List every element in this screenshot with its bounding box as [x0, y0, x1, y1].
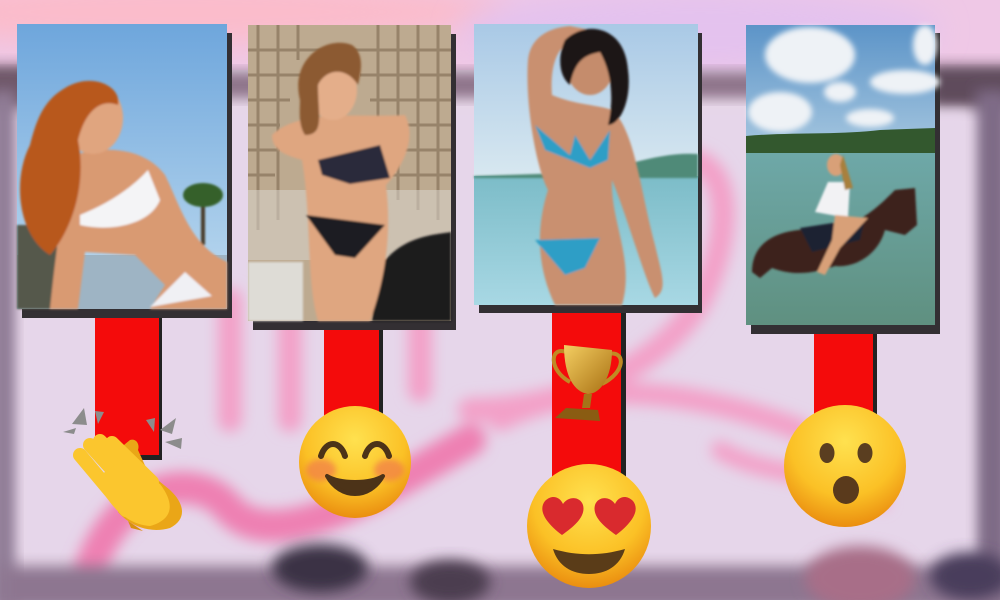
- photo shadow 3: [479, 33, 702, 313]
- photo 4: [746, 25, 940, 325]
- ribbon 3: [552, 305, 626, 480]
- photo shadow 4: [751, 33, 940, 334]
- panel: photo 1 with ribbon and clap emoji: [17, 24, 232, 531]
- icon: trophy: [554, 345, 621, 421]
- panel: photo 3 with ribbon, trophy and heart-eyes emoji: [474, 24, 702, 588]
- photo 1: [17, 24, 227, 309]
- ribbon 4: [814, 325, 877, 420]
- icon: heart-eyes face: [527, 464, 651, 588]
- icon: clapping hands: [63, 408, 182, 531]
- photo shadow 2: [253, 34, 456, 330]
- photo shadow 1: [22, 33, 232, 318]
- photo 3: [474, 24, 698, 305]
- panel: photo 4 with ribbon and surprised emoji: [746, 25, 940, 527]
- panel: photo 2 with ribbon and smile emoji: [248, 25, 456, 518]
- icon: surprised face: [784, 405, 906, 527]
- photo 2: [248, 25, 451, 321]
- ribbon 1: [95, 309, 162, 460]
- ribbon 2: [324, 321, 383, 436]
- icon: smiling face: [299, 406, 411, 518]
